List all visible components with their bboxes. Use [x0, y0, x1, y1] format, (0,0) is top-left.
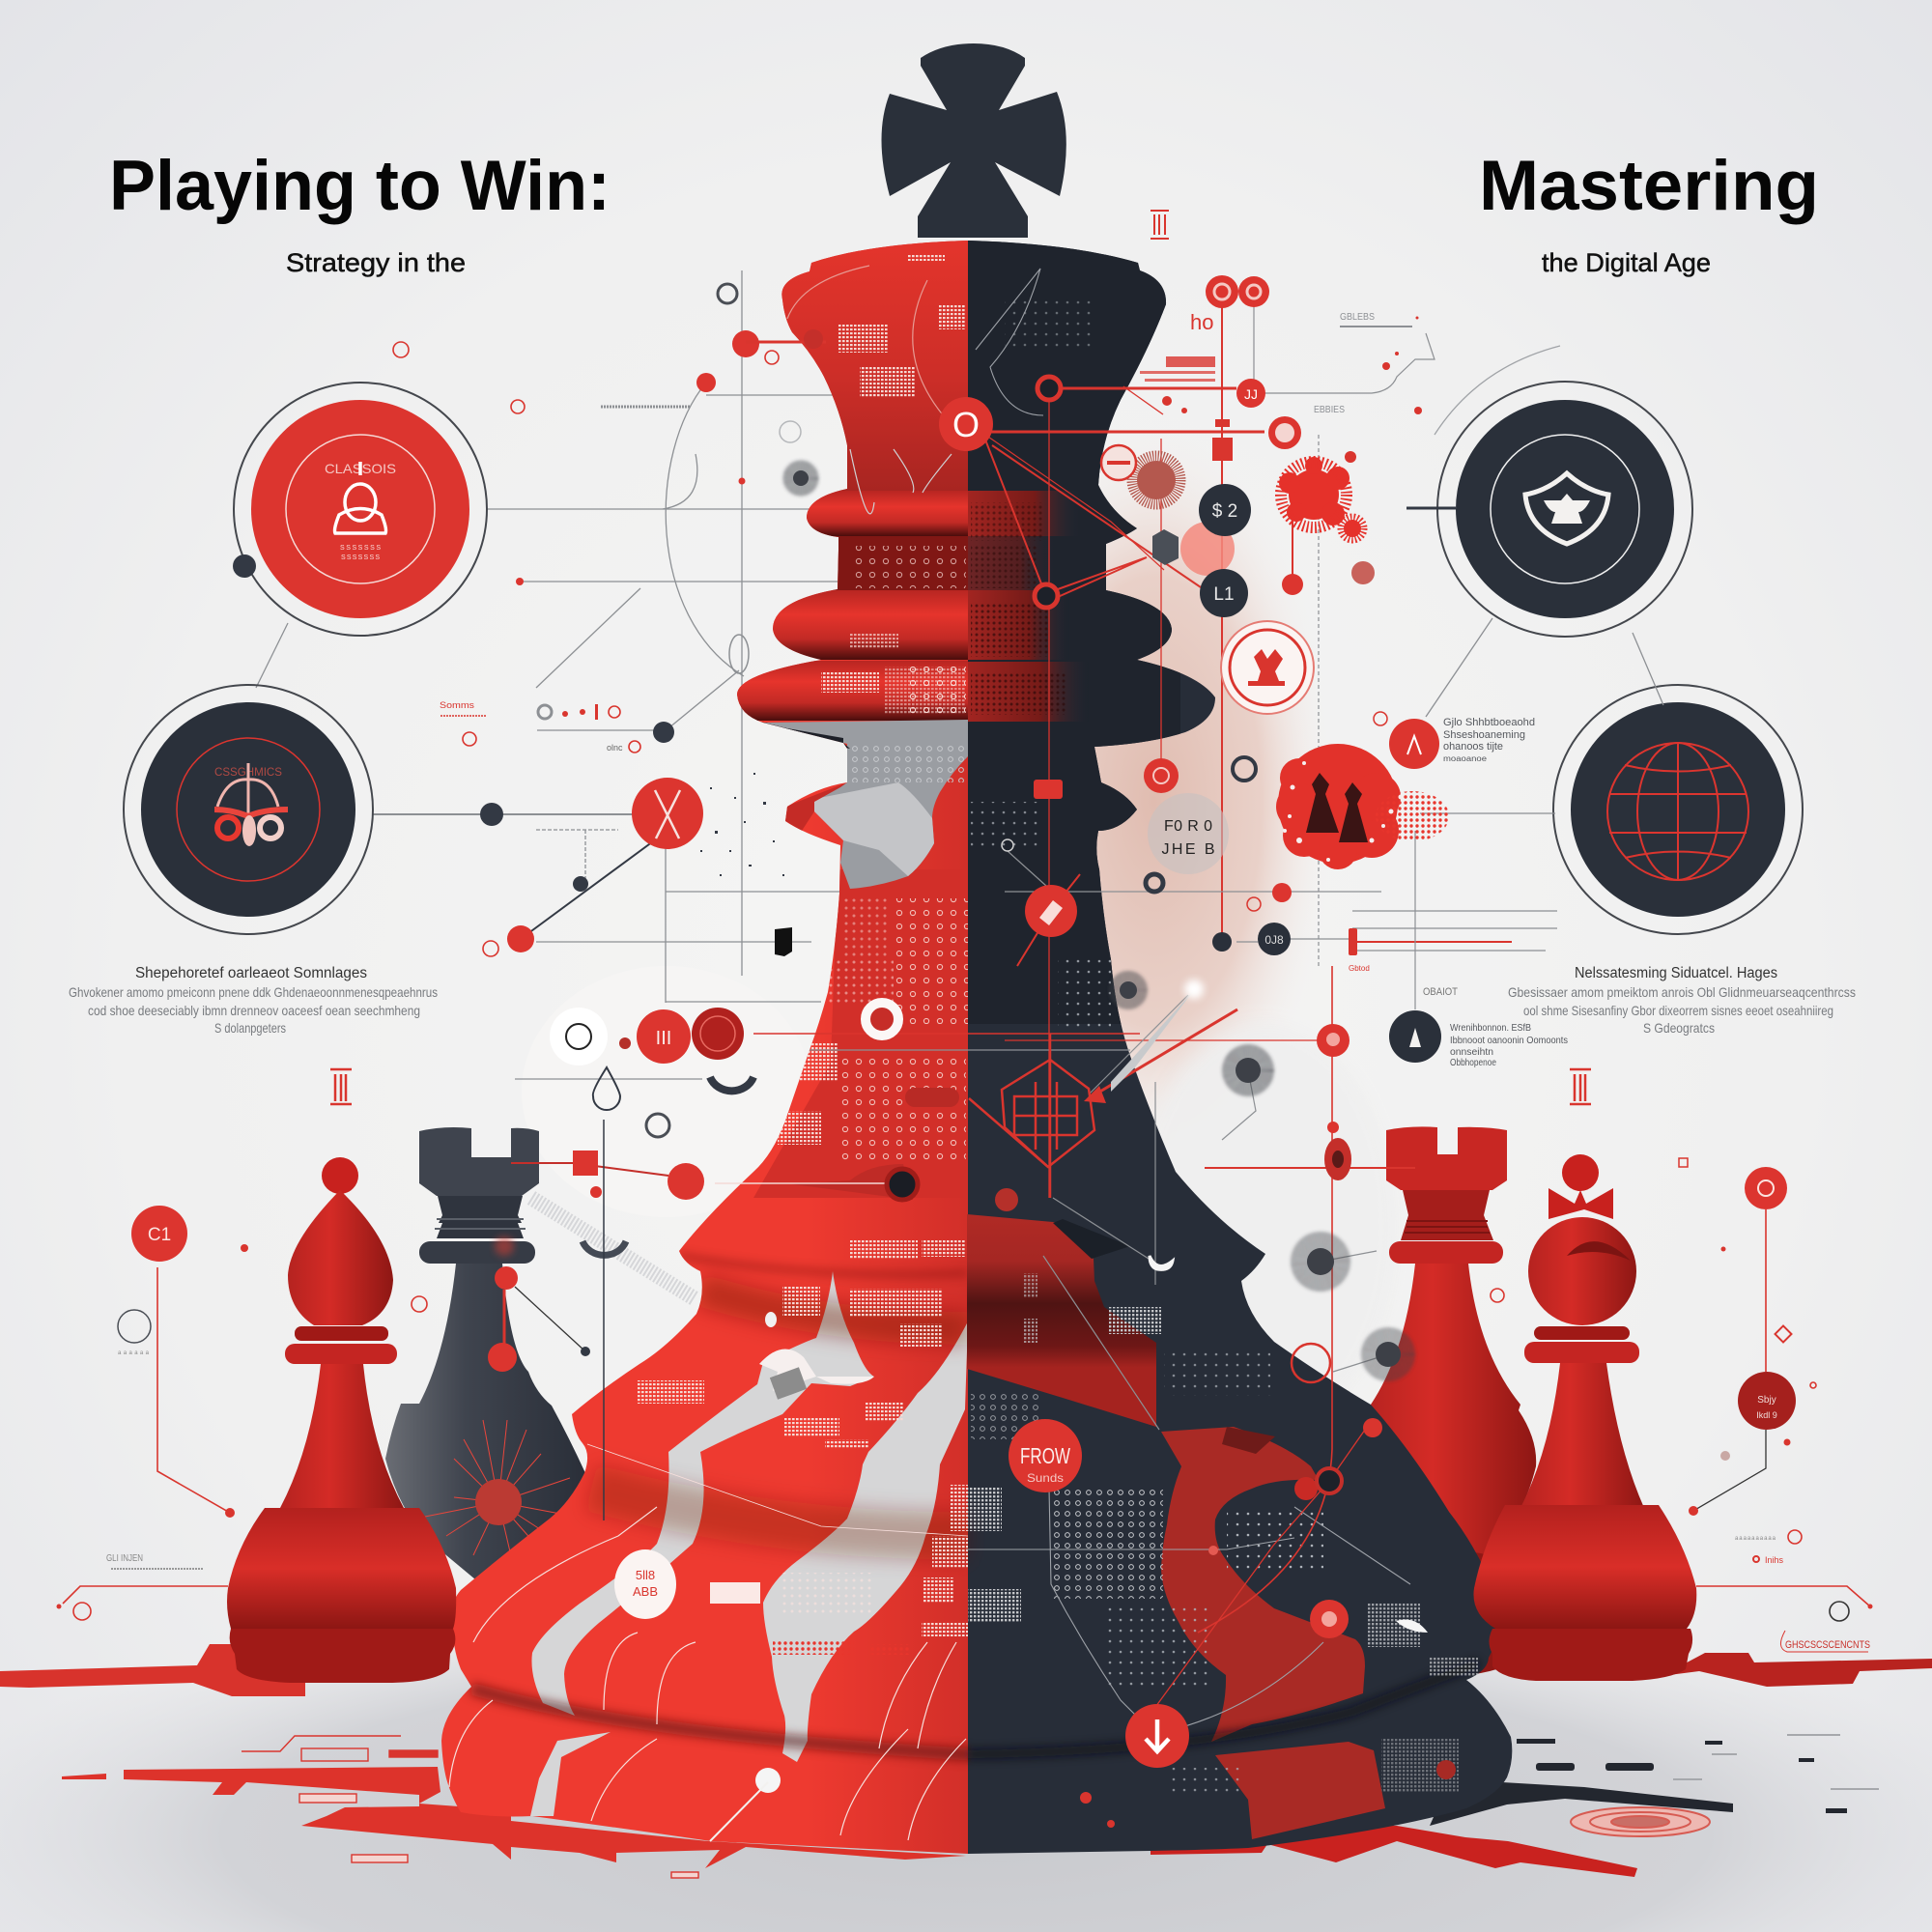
circle FROW [1009, 1419, 1082, 1492]
label top right: GBLEBS [1340, 312, 1375, 323]
king thin contour lines [449, 266, 968, 1840]
caption beside A: onnseihtn [1450, 1047, 1493, 1058]
title right: Mastering: Mastering [1479, 147, 1819, 225]
left small rings [73, 342, 1849, 1621]
red leader lower left [56, 1586, 228, 1609]
left small labels: aaaaaa [118, 1350, 150, 1356]
red node I left: C1 [148, 1225, 171, 1245]
center node O [939, 397, 993, 451]
pawn red left [227, 1157, 456, 1683]
circle: dark shield [1406, 382, 1692, 637]
caption near A [1443, 717, 1535, 763]
circle: red person [233, 383, 487, 636]
circle: red person: SSSSSSS [341, 554, 380, 561]
king left: tier shadows [591, 1290, 968, 1536]
circle: globe [1426, 346, 1803, 934]
right bottom leader and pill: aaaaaaaaaa [1735, 1536, 1776, 1542]
medallion [1221, 621, 1314, 714]
floor puddle bottom left [62, 1767, 966, 1868]
caption beside A [1450, 1023, 1568, 1068]
king main: left half red, right half dark [425, 232, 1519, 1864]
caption beside A: Ibbnooot oanoonin Oomoonts [1450, 1036, 1568, 1046]
floor puddle bottom right [1151, 1826, 1637, 1877]
text block right: Nelssatesming Siduatcel. Hages [1575, 965, 1777, 981]
black tag [775, 927, 792, 956]
label top right: EBBIES [1314, 405, 1345, 415]
text block left: S dolanpgeters [214, 1020, 286, 1036]
circle FROW: Sunds [1027, 1471, 1064, 1485]
gray ring dial: F0 R 0 [1164, 818, 1212, 835]
king left: neck drape [763, 720, 968, 889]
pink blob [1180, 522, 1235, 576]
rook dark [385, 1127, 585, 1579]
red dots top right [1162, 317, 1422, 463]
gray ring dial: JHE B [1161, 841, 1215, 858]
circle FROW: FROW [1020, 1443, 1070, 1468]
left small labels [106, 700, 623, 1569]
gray tags on floor [1673, 1735, 1879, 1789]
connector lines left [256, 270, 860, 1079]
ring node lower [1294, 1468, 1342, 1500]
ring large [1292, 1344, 1330, 1382]
network lines right [753, 292, 1512, 1710]
white button on base: 5ll8 [636, 1568, 655, 1582]
rook red [1343, 1126, 1555, 1676]
red node beside A [1317, 1024, 1350, 1057]
red top nodes [1206, 275, 1301, 449]
column icon right [1570, 1069, 1591, 1104]
red top nodes: JJ [1244, 386, 1258, 402]
red oval ring [1324, 1122, 1351, 1180]
king right: text patches [968, 1273, 1478, 1792]
text block right: ool shme Sisesanfiny Gbor dixeorrem sisnes eeoet oseahniireg [1523, 1003, 1833, 1018]
left small labels: GLI INJEN [106, 1553, 143, 1564]
text block left: Shepehoretef oarleaeot Somnlages [135, 965, 367, 981]
text block right: Gbesissaer amom pmeiktom anrois Obl Glidnmeuarseaqcenthrcss [1508, 984, 1856, 1000]
center node O: O [952, 405, 980, 444]
title left: Playing to Win: Playing to Win: [109, 147, 611, 225]
caption near A: Gjlo Shhbtboeaohd [1443, 717, 1535, 728]
caption beside A: Wrenihbonnon. ESfB [1450, 1023, 1531, 1034]
network lines gray right [810, 292, 1557, 1430]
hexagon net icon [969, 1034, 1094, 1198]
circle: red person: CLASSOIS [325, 461, 396, 476]
king left: silver stripes [530, 1271, 968, 1816]
crescent white [755, 1256, 1428, 1793]
small row marks [562, 704, 598, 720]
gray ring dial [1148, 793, 1229, 874]
white button on base: ABB [633, 1584, 658, 1599]
circle: dark strategy emblem [124, 685, 373, 934]
label bar: OBAIOT [1423, 986, 1458, 998]
king right: tier shadow [968, 1663, 1478, 1754]
circle arrow down [1125, 1704, 1189, 1768]
flange node [715, 1164, 918, 1200]
fuzzy centers [793, 470, 1401, 1367]
caption near A: Shseshoaneming [1443, 729, 1525, 741]
drop and horseshoes [582, 1067, 753, 1255]
right bottom leader and pill: GHSCSCSCENCNTS [1785, 1639, 1870, 1651]
king left: text patches [638, 255, 968, 1636]
line pin bottom [710, 1782, 768, 1841]
bubbles row [550, 1008, 744, 1065]
red node [1282, 574, 1303, 595]
fuzzy dots [790, 468, 1406, 1372]
right wax seal: Sbjy [1757, 1395, 1776, 1406]
left gray rings [118, 284, 801, 1343]
red circle A [1389, 719, 1439, 769]
right seal top [1745, 1167, 1787, 1209]
fingerprint mark [1571, 1807, 1710, 1836]
text block left: cod shoe deeseciably ibmn drenneov oaceesf oean seechmheng [88, 1003, 420, 1018]
text block right: S Gdeogratcs [1643, 1020, 1715, 1036]
floor puddle right [1662, 1653, 1932, 1687]
text block right [1508, 965, 1856, 1036]
text block left: Ghvokener amomo pmeiconn pnene ddk Ghdenaeoonnmenesqpeaehnrus [69, 984, 438, 1000]
red node I left [131, 1206, 187, 1262]
medallion faded [1101, 445, 1136, 480]
floor puddle left [0, 1644, 305, 1696]
king left: body shade [753, 869, 921, 1198]
dark node L1: L1 [1213, 584, 1235, 605]
red leader left [157, 1244, 248, 1518]
subtitle left: Strategy in the [286, 248, 466, 277]
crown cross [881, 43, 1066, 238]
right bottom leader and pill: Inihs [1765, 1555, 1784, 1565]
comet blade [1084, 980, 1204, 1103]
subtitle right: the Digital Age [1542, 248, 1711, 277]
red seal faded [1351, 561, 1375, 584]
left nodes [480, 329, 826, 952]
label top right [1314, 312, 1412, 415]
dark nodes lower right [1212, 923, 1357, 955]
dark nodes lower right: 0J8 [1264, 933, 1284, 947]
dark node L1 [1200, 569, 1248, 617]
right bottom leader and pill [1696, 1536, 1872, 1652]
dark streak and dashes right [1430, 1739, 1847, 1826]
circle: dark strategy emblem: CSSGHMICS [214, 765, 282, 779]
node red hotspot [1025, 885, 1077, 937]
caption near A: ohanoos tijte [1443, 741, 1503, 753]
king piece red right [1473, 1154, 1696, 1681]
column icon left [330, 1069, 352, 1104]
ring nodes [1035, 377, 1061, 608]
dark node [1199, 484, 1251, 536]
text block left [69, 965, 438, 1036]
dark A node [1389, 1010, 1441, 1063]
caption near A: moaoanoe [1443, 754, 1488, 763]
small rings right [1002, 712, 1387, 911]
king right: dark red regions [968, 491, 1066, 536]
red badge on dark body [1034, 758, 1292, 902]
right leader [1679, 1158, 1791, 1516]
left red X node [632, 778, 703, 849]
cube [1152, 529, 1179, 565]
red dots on dark [995, 1188, 1456, 1828]
label bar [1349, 964, 1458, 998]
left small labels: olnc [607, 743, 623, 753]
white splash on body [759, 1003, 959, 1400]
white button on base [614, 1549, 676, 1619]
label bar: Gbtod [1349, 964, 1370, 973]
right wax seal: Ikdl 9 [1756, 1410, 1777, 1420]
red seal dark body [1310, 1600, 1349, 1638]
rook connector [488, 1120, 704, 1520]
circle: red person: SSSSSSS [340, 545, 381, 552]
fuzzy blob red [1133, 457, 1179, 503]
icon column top [1151, 211, 1169, 239]
red text stack [1140, 356, 1233, 461]
label ho: ho [1190, 310, 1213, 334]
left small labels: Somms [440, 700, 475, 710]
red splash with chess pieces [1276, 744, 1449, 869]
right wax seal [1738, 1372, 1796, 1430]
scatter specks [700, 773, 784, 876]
dark node: $ 2 [1212, 501, 1237, 522]
caption beside A: Obbhopenoe [1450, 1058, 1496, 1068]
splash red top [1279, 457, 1364, 540]
puddle labels [242, 1736, 698, 1878]
bubbles row: III [656, 1028, 671, 1049]
